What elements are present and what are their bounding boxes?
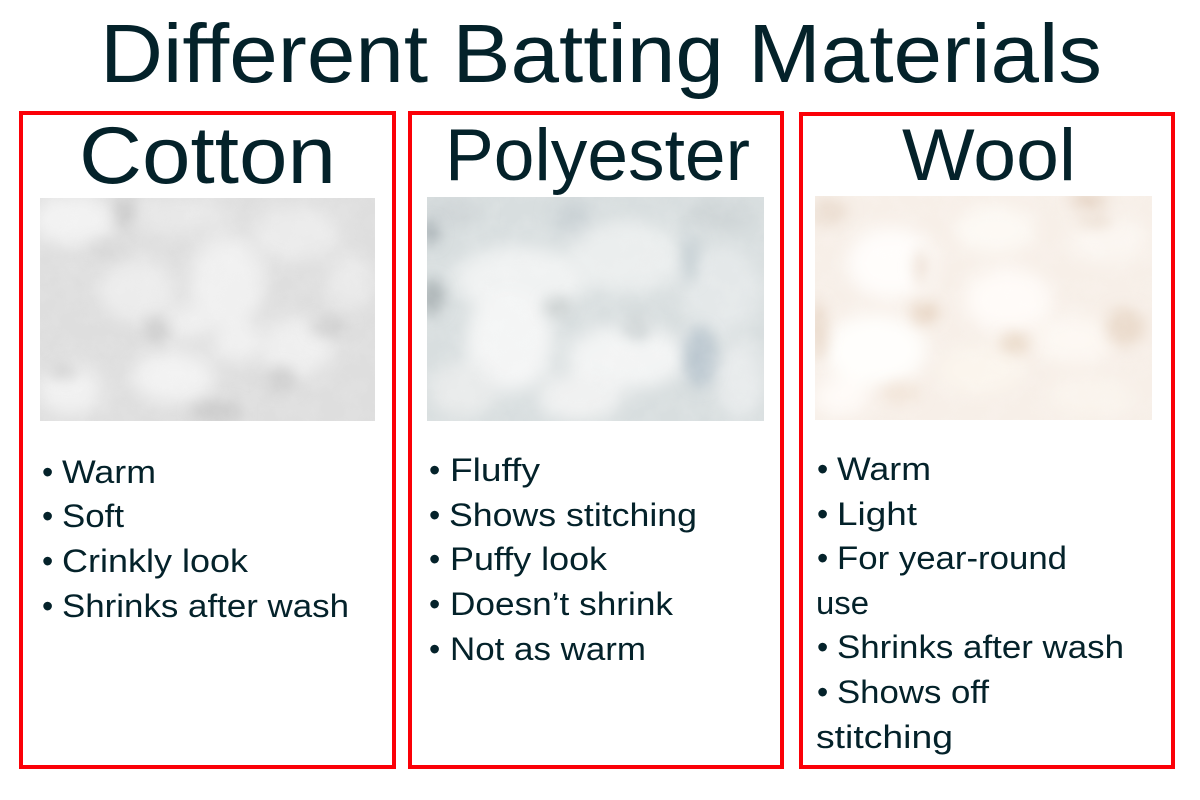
bullet list: wool — [816, 451, 1124, 755]
bullet list: wool: Shows off — [837, 674, 989, 710]
bullet list: cotton: • — [42, 454, 53, 490]
bullet list: cotton: Crinkly look — [62, 543, 249, 579]
photo: wool fleece — [808, 193, 1152, 420]
heading: wool: Wool — [902, 115, 1076, 196]
bullet list: wool: • — [817, 540, 828, 576]
bullet list: cotton: Shrinks after wash — [62, 588, 349, 624]
bullet list: cotton: • — [42, 498, 53, 534]
bullet list: wool: For year-round — [837, 540, 1067, 576]
bullet list: polyester — [429, 452, 697, 667]
bullet list: wool: • — [817, 629, 828, 665]
bullet list: polyester: • — [429, 541, 440, 577]
heading: cotton: Cotton — [79, 111, 336, 201]
bullet list: wool: stitching — [816, 719, 953, 755]
bullet list: cotton: Soft — [62, 498, 124, 534]
bullet list: cotton: • — [42, 543, 53, 579]
photo: cotton fibre — [31, 194, 375, 422]
heading: polyester: Polyester — [445, 115, 750, 196]
bullet list: polyester: Doesn’t shrink — [450, 586, 674, 622]
bullet list: polyester: Fluffy — [450, 452, 540, 488]
bullet list: polyester: Puffy look — [450, 541, 608, 577]
bullet list: polyester: • — [429, 452, 440, 488]
panel: wool — [801, 114, 1173, 767]
bullet list: wool: Light — [837, 496, 917, 532]
bullet list: polyester: Shows stitching — [449, 497, 697, 533]
bullet list: wool: Warm — [837, 451, 931, 487]
panel: cotton — [21, 111, 394, 767]
bullet list: cotton: • — [42, 588, 53, 624]
title: Different Batting Materials — [100, 7, 1102, 100]
panel: polyester — [410, 113, 782, 767]
bullet list: wool: • — [817, 451, 828, 487]
bullet list: polyester: Not as warm — [450, 631, 646, 667]
bullet list: cotton: Warm — [62, 454, 156, 490]
bullet list: polyester: • — [429, 631, 440, 667]
bullet list: wool: Shrinks after wash — [837, 629, 1124, 665]
photo: polyester fibre — [420, 197, 764, 421]
bullet list: wool: • — [817, 496, 828, 532]
bullet list: polyester: • — [429, 586, 440, 622]
bullet list: wool: • — [817, 674, 828, 710]
bullet list: polyester: • — [429, 497, 440, 533]
bullet list: cotton — [42, 454, 349, 624]
bullet list: wool: use — [816, 585, 869, 621]
